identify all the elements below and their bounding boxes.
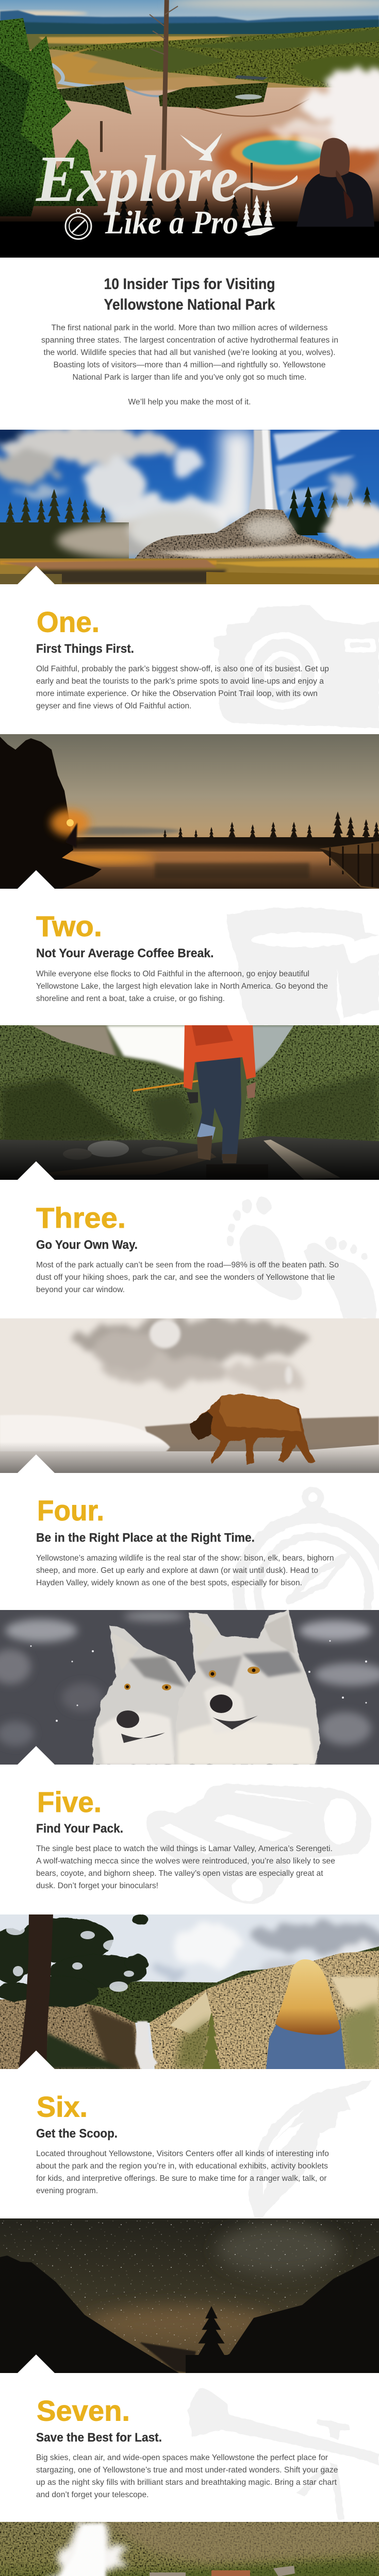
right wolf xyxy=(174,1610,321,1765)
body: dusk. Don’t forget your binoculars! xyxy=(36,1882,158,1890)
body: Located throughout Yellowstone, Visitors Centers offer all kinds of interesting info xyxy=(36,2149,329,2158)
photo: hiker on log bridge xyxy=(0,1025,379,1180)
photo: Castle Geyser erupting xyxy=(0,430,379,584)
body: A wolf-watching mecca since the wolves were reintroduced, you’re also likely to see xyxy=(36,1857,335,1866)
intro paragraph: National Park is larger than life and you’ve only got so much time. xyxy=(72,373,306,382)
title script: Like a Pro xyxy=(105,204,238,241)
number: Five. xyxy=(37,1786,102,1818)
intro paragraph xyxy=(41,324,338,406)
body: and don’t forget your telescope. xyxy=(36,2490,149,2499)
heading: 10 Insider Tips for Visiting xyxy=(104,276,275,293)
icon: compass xyxy=(65,209,91,239)
title script xyxy=(36,133,298,241)
body: bears, coyote, and bighorn sheep. The valley’s open vistas are especially great at xyxy=(36,1869,323,1878)
panel: tip six xyxy=(36,2080,371,2218)
number: Two. xyxy=(36,910,102,942)
body: evening program. xyxy=(36,2187,98,2195)
body: beyond your car window. xyxy=(36,1285,125,1294)
pine tree xyxy=(0,1914,149,2069)
woman viewer xyxy=(296,138,374,227)
subheading: Get the Scoop. xyxy=(36,2127,118,2141)
body: Old Faithful, probably the park’s biggest show-off, is also one of its busiest. Get up xyxy=(36,665,329,673)
body: Big skies, clean air, and wide-open spaces make Yellowstone the perfect place for xyxy=(36,2453,328,2462)
intro paragraph: We’ll help you make the most of it. xyxy=(128,398,251,406)
body: for kids, and interpretive offerings. Be sure to make time for a ranger walk, talk, or xyxy=(36,2174,327,2183)
body xyxy=(36,2453,338,2499)
body: sheep, and more. Get up early and explore at dawn (or wait until dusk). Head to xyxy=(36,1566,318,1575)
photo: two wolves in snow xyxy=(0,1610,379,1765)
panel: tip one xyxy=(36,605,379,728)
heading: Yellowstone National Park xyxy=(104,296,275,313)
intro paragraph: Boasting lots of visitors—more than 4 million—and rightfully so. Yellowstone xyxy=(54,361,326,369)
hero banner: Explore Like a Pro xyxy=(0,0,379,258)
photo: canyon and waterfall xyxy=(0,1914,379,2069)
panel: tip five xyxy=(36,1784,371,1904)
body xyxy=(36,665,329,710)
left wolf xyxy=(93,1625,196,1765)
woman with blonde hair xyxy=(266,1959,345,2069)
watermark: binoculars xyxy=(146,1784,371,1904)
notch xyxy=(18,870,55,889)
body: Most of the park actually can’t be seen from the road—98% is off the beaten path. So xyxy=(36,1261,339,1269)
body: Yellowstone Lake, the largest high elevation lake in North America. Go beyond the xyxy=(36,982,328,991)
notch xyxy=(18,566,55,584)
number: Four. xyxy=(37,1494,104,1527)
body: geyser and fine views of Old Faithful action. xyxy=(36,702,192,710)
watermark: feather xyxy=(249,2080,371,2218)
body: stargazing, one of Yellowstone’s true and most under-rated wonders. Shift your gaze xyxy=(36,2466,338,2475)
intro paragraph: the world. Wildlife species that had all but vanished (we’re looking at you, wolves). xyxy=(43,348,335,357)
body xyxy=(36,2149,329,2195)
body: more intimate experience. Or hike the Observation Point Trail loop, with its own xyxy=(36,689,318,698)
body xyxy=(36,970,328,1003)
subheading: Go Your Own Way. xyxy=(36,1238,138,1252)
panel: tip three xyxy=(36,1195,376,1318)
photo: bison in steam xyxy=(0,1318,379,1473)
notch xyxy=(18,2050,55,2069)
body: While everyone else flocks to Old Faithful in the afternoon, go enjoy beautiful xyxy=(36,970,309,978)
watermark: footprints xyxy=(227,1195,376,1318)
body xyxy=(36,1844,335,1890)
panel: tip four xyxy=(36,1490,379,1667)
geyser plume xyxy=(46,2522,129,2576)
intro paragraph: The first national park in the world. More than two million acres of wilderness xyxy=(52,324,328,332)
body xyxy=(36,1261,339,1294)
watermark: telescope xyxy=(188,2388,379,2519)
watermark: compass xyxy=(239,1490,379,1667)
wooden bridge xyxy=(319,841,379,889)
photo: Old Faithful and Inn xyxy=(0,2522,379,2576)
subheading: Save the Best for Last. xyxy=(36,2431,162,2445)
panel: tip two xyxy=(36,908,379,1025)
subheading: Not Your Average Coffee Break. xyxy=(36,946,213,960)
number: Six. xyxy=(37,2091,88,2123)
body: The single best place to watch the wild things is Lamar Valley, America’s Serengeti. xyxy=(36,1844,333,1853)
notch xyxy=(18,2354,55,2373)
watermark: camera xyxy=(214,605,379,728)
body: up as the night sky fills with brilliant stars and breathtaking magic. Bring a star chart xyxy=(36,2478,337,2487)
intro paragraph: spanning three states. The largest concentration of active hydrothermal features in xyxy=(41,336,338,345)
bison xyxy=(190,1394,316,1465)
watermark: coffee mug xyxy=(227,908,379,1025)
intro block xyxy=(41,276,338,406)
body: shoreline and rent a boat, take a cruise, or go fishing. xyxy=(36,994,225,1003)
body: about the park and the region you’re in, with educational exhibits, activity booklets xyxy=(36,2162,328,2171)
title script: Explore xyxy=(36,142,238,215)
subheading: First Things First. xyxy=(36,642,134,656)
subheading: Find Your Pack. xyxy=(36,1822,123,1836)
photo: stars over valley xyxy=(0,2218,379,2373)
body: early and beat the tourists to the park’s prime spots to avoid line-ups and enjoy a xyxy=(36,677,324,686)
body: Hayden Valley, widely known as one of the best spots, especially for bison. xyxy=(36,1579,302,1587)
number: One. xyxy=(37,606,100,638)
number: Seven. xyxy=(37,2395,130,2427)
notch xyxy=(18,1746,55,1765)
hiker xyxy=(184,1025,256,1163)
panel: tip seven xyxy=(36,2388,379,2519)
subheading: Be in the Right Place at the Right Time. xyxy=(36,1531,255,1545)
body: Yellowstone’s amazing wildlife is the real star of the show: bison, elk, bears, bighorn xyxy=(36,1554,334,1563)
body: dust off your hiking shoes, park the car, and see the wonders of Yellowstone that lie xyxy=(36,1273,335,1282)
notch xyxy=(18,1454,55,1473)
photo: sunrise over lake xyxy=(0,734,379,889)
number: Three. xyxy=(36,1201,126,1234)
icon: pine trees xyxy=(242,195,275,236)
body xyxy=(36,1554,334,1587)
heading xyxy=(104,276,275,313)
notch xyxy=(18,1161,55,1180)
